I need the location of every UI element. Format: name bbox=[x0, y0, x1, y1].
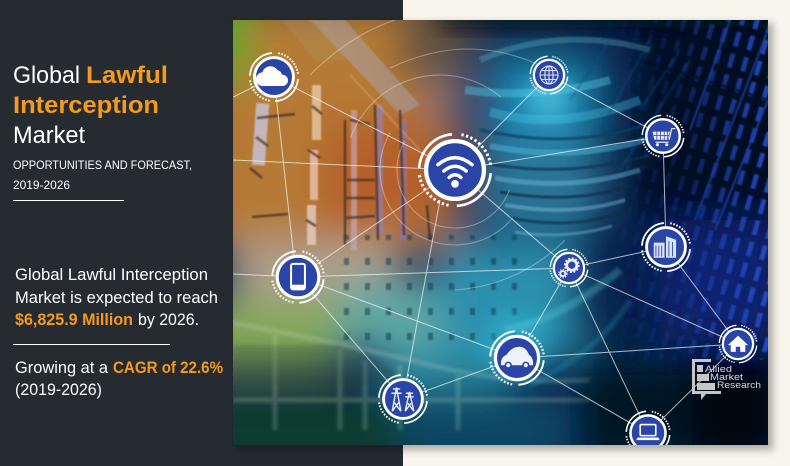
top dark edge bbox=[429, 20, 768, 38]
icon: globe bbox=[529, 55, 569, 95]
logo: Allied Market Research: Allied bbox=[705, 364, 732, 375]
window grid dots bbox=[343, 234, 518, 340]
glow bbox=[527, 76, 571, 120]
right cream panel bbox=[403, 0, 790, 466]
icon: home bbox=[718, 324, 758, 364]
title: Interception bbox=[13, 92, 159, 119]
icon: smartphone bbox=[270, 249, 326, 305]
market size text: Global Lawful Interception bbox=[15, 266, 208, 284]
building windows bbox=[252, 20, 420, 250]
logo: Allied Market Research: Market bbox=[710, 372, 743, 383]
market size text bbox=[15, 266, 218, 329]
title: Market bbox=[13, 122, 85, 149]
concentric arcs around wifi bbox=[310, 20, 565, 292]
icon: laptop bbox=[626, 410, 670, 445]
title: Lawful bbox=[86, 62, 168, 89]
subtitle: 2019-2026 bbox=[13, 178, 70, 192]
teal curved bands bbox=[465, 40, 690, 235]
market size text: Market is expected to reach bbox=[15, 289, 218, 307]
network lines bbox=[233, 75, 738, 433]
left dark panel bbox=[0, 0, 403, 466]
logo: Allied Market Research bbox=[692, 359, 761, 400]
CAGR text: Growing at a bbox=[15, 359, 109, 377]
CAGR text bbox=[15, 359, 223, 399]
CAGR text: CAGR of 22.6% bbox=[113, 359, 223, 377]
icon: gears bbox=[549, 248, 589, 288]
title: Global bbox=[13, 62, 80, 89]
background photo: building with network bbox=[233, 20, 768, 445]
icon: cloud bbox=[248, 51, 300, 103]
lower glass framing bbox=[233, 323, 590, 430]
title bbox=[13, 62, 168, 149]
logo: Allied Market Research: Research bbox=[717, 380, 761, 391]
icon: buildings bbox=[640, 221, 692, 273]
icon: wifi bbox=[416, 131, 494, 209]
CAGR text: (2019-2026) bbox=[15, 381, 102, 399]
icon: car bbox=[488, 329, 546, 387]
subtitle: OPPORTUNITIES AND FORECAST, bbox=[13, 158, 192, 172]
market size text: by 2026. bbox=[138, 311, 199, 329]
divider bbox=[13, 200, 124, 201]
subtitle bbox=[13, 158, 192, 192]
right blue streaks bbox=[621, 20, 768, 360]
divider bbox=[13, 344, 170, 345]
market size text: $6,825.9 Million bbox=[15, 311, 133, 329]
icon: transmission towers bbox=[377, 373, 429, 425]
icon: shopping cart bbox=[640, 113, 686, 159]
